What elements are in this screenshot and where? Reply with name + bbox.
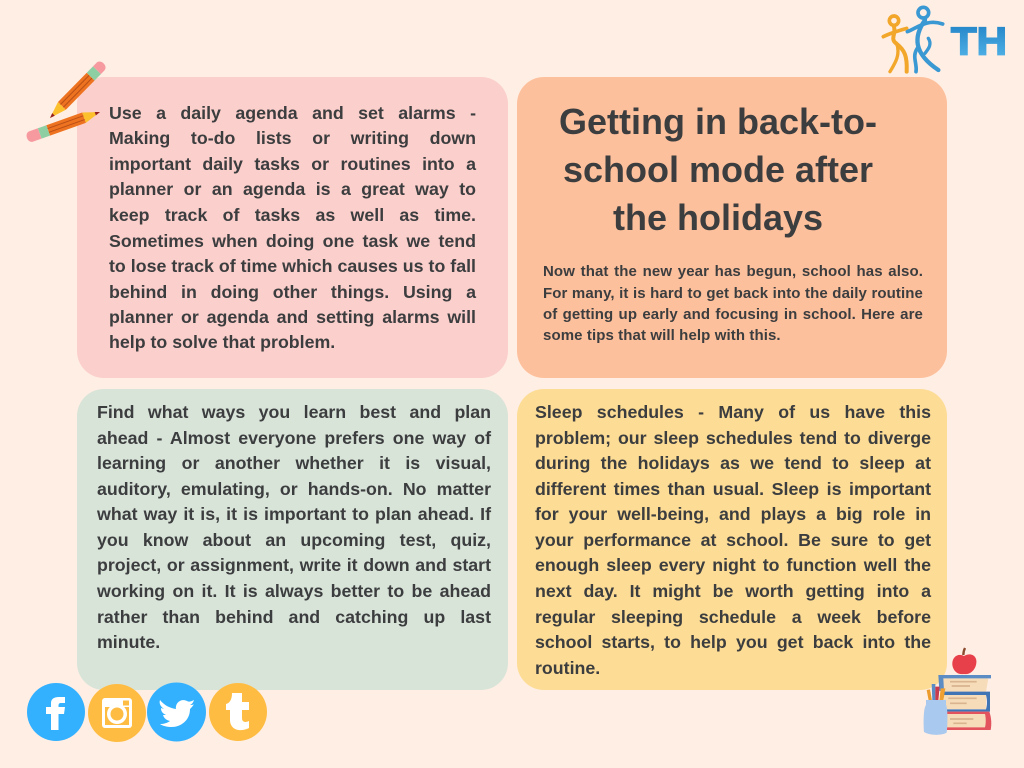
text: daily agenda tip: Sometimes when doing one task we tend xyxy=(109,231,476,251)
panel: daily agenda tip xyxy=(77,77,508,378)
text: sleep schedules tip: during the holidays as we tend to sleep at xyxy=(535,453,931,473)
panel: sleep schedules tip xyxy=(517,389,947,690)
text: sleep schedules tip: enough sleep every night to function well the xyxy=(535,555,931,575)
text: daily agenda tip: to lose track of time which causes us to fall xyxy=(109,256,476,276)
text: daily agenda tip xyxy=(109,103,476,352)
heading: title xyxy=(559,101,877,238)
text: learning tip: project, or assignment, write it down and start xyxy=(97,555,491,575)
text: introduction: some tips that will help with this. xyxy=(543,327,781,344)
heading: title: school mode after xyxy=(563,149,873,190)
text: daily agenda tip: Making to-do lists or writing down xyxy=(109,128,476,148)
heading: title: the holidays xyxy=(613,197,823,238)
icon: TH logo: TH xyxy=(951,19,1007,63)
text: sleep schedules tip: school starts, to help you get back into the xyxy=(535,632,931,652)
icon: books, apple and pencil jar xyxy=(924,648,992,735)
text: introduction xyxy=(543,263,923,344)
text: learning tip: rather than behind and catching up last xyxy=(97,607,491,627)
text: daily agenda tip: planner or an agenda is a great way to xyxy=(109,179,476,199)
text: introduction: Now that the new year has begun, school has also. xyxy=(543,263,923,280)
icon: Instagram xyxy=(88,684,146,742)
panel: title and introduction xyxy=(517,77,947,378)
text: introduction: For many, it is hard to get back into the daily routine xyxy=(543,285,923,302)
text: learning tip: you know about an upcoming test, quiz, xyxy=(97,530,491,550)
text: learning tip: auditory, emulating, or hands-on. No matter xyxy=(97,479,491,499)
text: sleep schedules tip: regular sleeping schedule a week before xyxy=(535,607,931,627)
panel: learning tip xyxy=(77,389,508,690)
text: daily agenda tip: behind in doing other things. Using a xyxy=(109,282,476,302)
text: sleep schedules tip: for your well-being, and plays a big role in xyxy=(535,504,931,524)
text: learning tip: minute. xyxy=(97,632,160,652)
text: sleep schedules tip xyxy=(535,402,932,678)
text: sleep schedules tip: your performance at school. Be sure to get xyxy=(535,530,931,550)
text: daily agenda tip: planner or agenda and setting alarms will xyxy=(109,307,476,327)
text: learning tip: Find what ways you learn best and plan xyxy=(97,402,491,422)
text: learning tip: what way it is, it is important to plan ahead. If xyxy=(97,504,491,524)
icon: TH logo xyxy=(881,6,1007,74)
text: daily agenda tip: important daily tasks or routines into a xyxy=(109,154,476,174)
text: daily agenda tip: Use a daily agenda and set alarms - xyxy=(109,103,476,123)
text: sleep schedules tip: Sleep schedules - Many of us have this xyxy=(535,402,931,422)
text: sleep schedules tip: problem; our sleep schedules tend to diverge xyxy=(535,428,931,448)
icon: Facebook xyxy=(27,683,85,741)
text: sleep schedules tip: next day. It might be worth getting into a xyxy=(535,581,931,601)
icon: Tumblr xyxy=(209,683,267,741)
text: learning tip: ahead - Almost everyone prefers one way of xyxy=(97,428,491,448)
text: sleep schedules tip: different times than usual. Sleep is important xyxy=(535,479,931,499)
text: daily agenda tip: help to solve that problem. xyxy=(109,332,335,352)
text: learning tip: learning or another whether it is visual, xyxy=(97,453,491,473)
text: learning tip xyxy=(97,402,492,652)
text: learning tip: working on it. It is always better to be ahead xyxy=(97,581,491,601)
text: daily agenda tip: keep track of tasks as well as time. xyxy=(109,205,476,225)
heading: title: Getting in back-to- xyxy=(559,101,877,142)
icon: Twitter xyxy=(147,682,206,742)
text: introduction: of getting up early and focusing in school. Here are xyxy=(543,306,923,323)
text: sleep schedules tip: routine. xyxy=(535,658,600,678)
